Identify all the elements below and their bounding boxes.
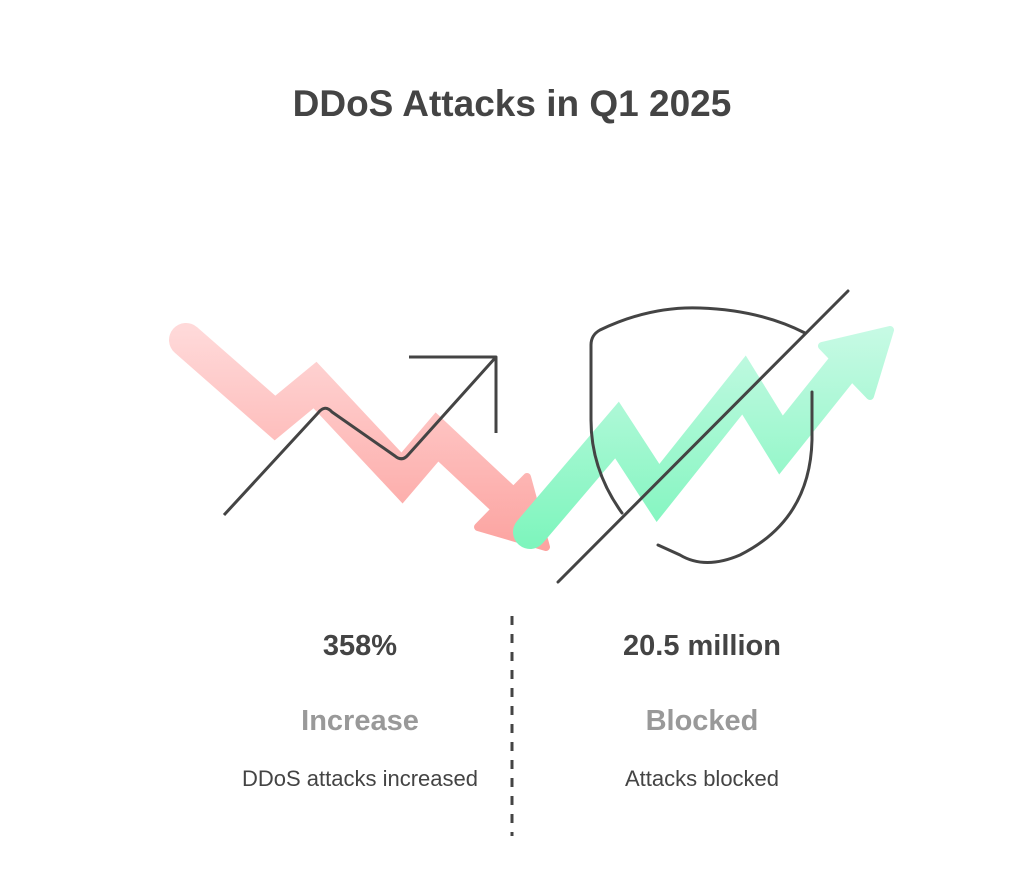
- icon: shield: [558, 291, 848, 582]
- stat: left: [242, 630, 478, 791]
- stat: right: Attacks blocked: [625, 766, 779, 791]
- stat: right: Blocked: [646, 705, 758, 737]
- stat: right: 20.5 million: [623, 630, 781, 662]
- green up arrow: [530, 330, 890, 532]
- stat: left: Increase: [301, 705, 419, 737]
- stat: right: [623, 630, 781, 791]
- red down arrow: [186, 340, 546, 547]
- icon: trend line arrow: [224, 357, 496, 515]
- divider: [510, 616, 514, 836]
- title: DDoS Attacks in Q1 2025: [293, 83, 731, 124]
- stat: left: DDoS attacks increased: [242, 766, 478, 791]
- stat: left: 358%: [323, 630, 397, 662]
